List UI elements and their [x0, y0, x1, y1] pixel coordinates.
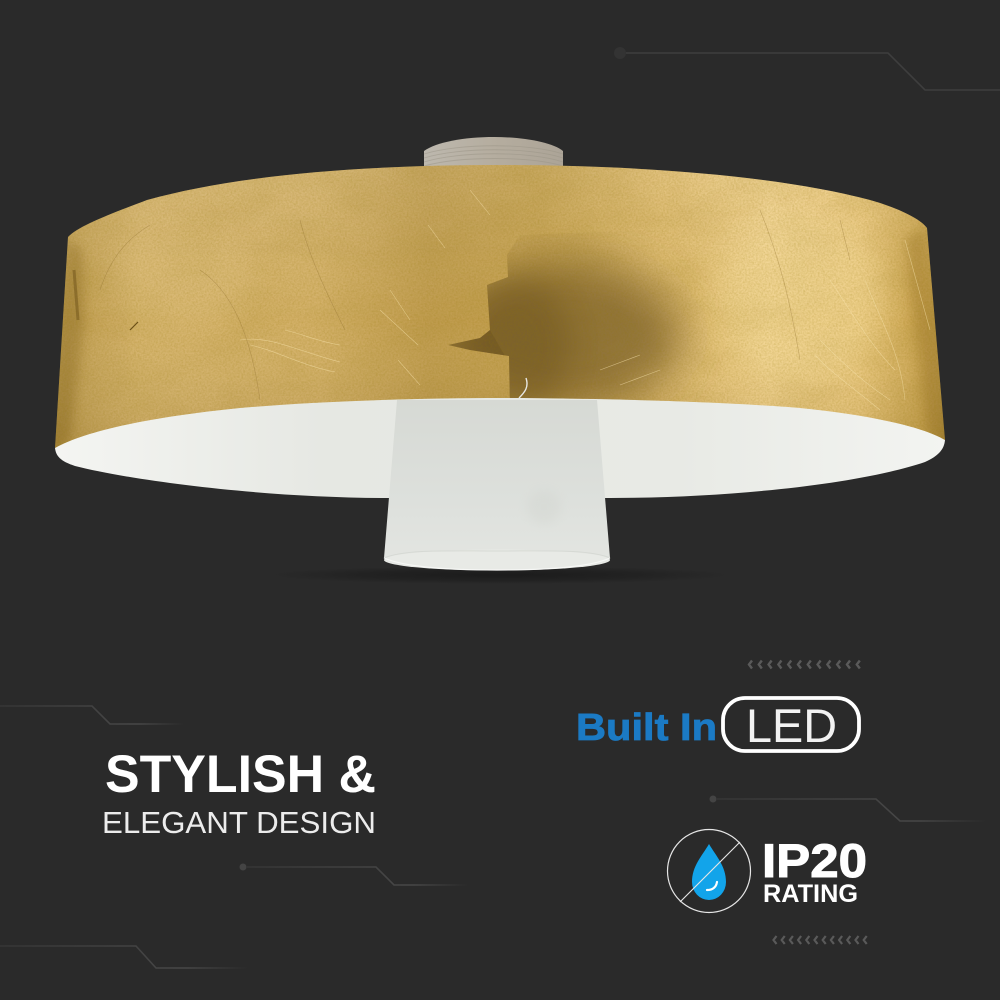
label: rating: RATING [763, 880, 858, 908]
leaf grain [50, 160, 950, 455]
chevron row: top [749, 660, 860, 668]
label: IP20: IP20 [762, 834, 867, 887]
circuit line: right [710, 796, 986, 821]
ceiling lamp [50, 137, 950, 570]
circuit line: centre left [240, 864, 468, 885]
icon: crossed water drop [668, 830, 750, 912]
heading line two: ELEGANT DESIGN [102, 805, 376, 840]
lamp inner white surface [55, 380, 945, 498]
label: LED: LED [746, 699, 837, 752]
chevron row: bottom [774, 936, 867, 944]
leaf cracks [240, 190, 930, 410]
label: built in: Built In [576, 707, 717, 749]
circuit line: upper left [0, 706, 184, 724]
power wire [519, 378, 527, 398]
gold leaf shade [50, 160, 950, 455]
badge: IP20 rating [668, 830, 867, 912]
heading: stylish and elegant design [102, 745, 376, 840]
circuit line: bottom left [0, 946, 248, 968]
circuit line: top right [614, 47, 1000, 90]
lamp ceiling collar [424, 137, 563, 172]
dark patch in the leaf [445, 260, 685, 410]
bright highlight [718, 232, 886, 370]
LED pill outline [723, 698, 859, 751]
frosted diffuser [384, 400, 610, 570]
heading line one: STYLISH & [105, 745, 376, 804]
lamp shadow [270, 566, 730, 584]
edge wear [56, 240, 84, 448]
badge: built in LED [576, 698, 859, 752]
